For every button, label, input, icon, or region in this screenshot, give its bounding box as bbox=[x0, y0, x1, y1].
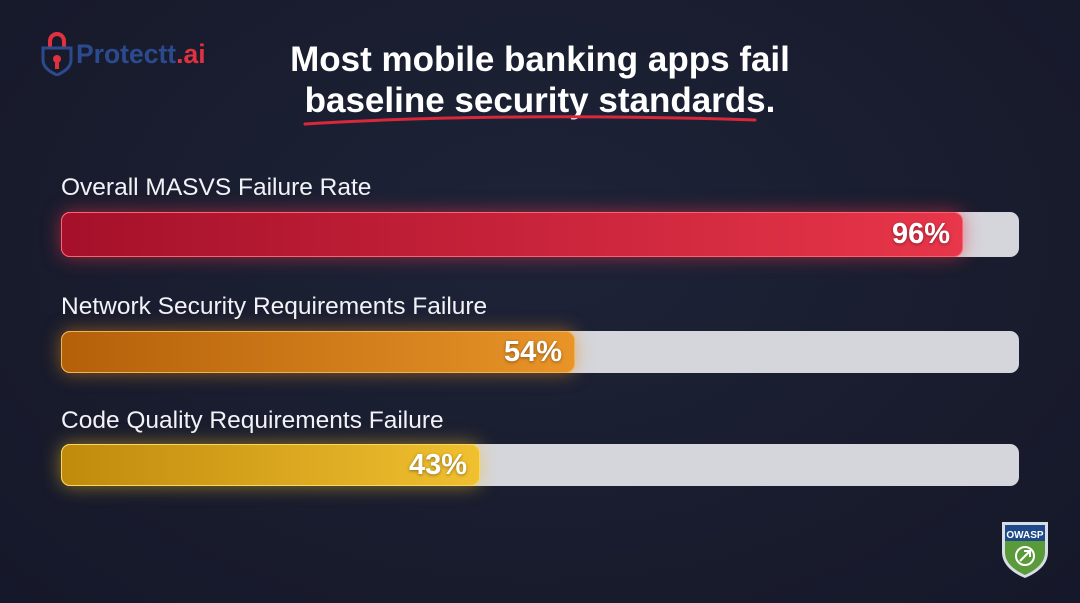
bar: 54% bbox=[61, 331, 1019, 373]
bar: 96% bbox=[61, 212, 1019, 257]
logo text: Protectt.ai bbox=[76, 39, 206, 69]
bar: 43%: 43% bbox=[409, 448, 467, 480]
icon: shield lock bbox=[42, 32, 72, 76]
title: Most mobile banking apps fail bbox=[290, 40, 790, 79]
label: overall: Overall MASVS Failure Rate bbox=[61, 174, 371, 201]
icon: OWASP badge bbox=[1002, 522, 1048, 578]
label: network: Network Security Requirements Failure bbox=[61, 293, 487, 320]
label: code quality: Code Quality Requirements Failure bbox=[61, 407, 444, 434]
bar: 43% bbox=[61, 444, 1019, 486]
title: baseline security standards. bbox=[305, 81, 775, 120]
title underline bbox=[304, 115, 756, 126]
bar: 54%: 54% bbox=[504, 336, 562, 368]
icon: OWASP badge: OWASP bbox=[1006, 530, 1044, 541]
logo bbox=[42, 32, 206, 76]
title bbox=[290, 40, 790, 120]
bar: 96%: 96% bbox=[892, 218, 950, 250]
